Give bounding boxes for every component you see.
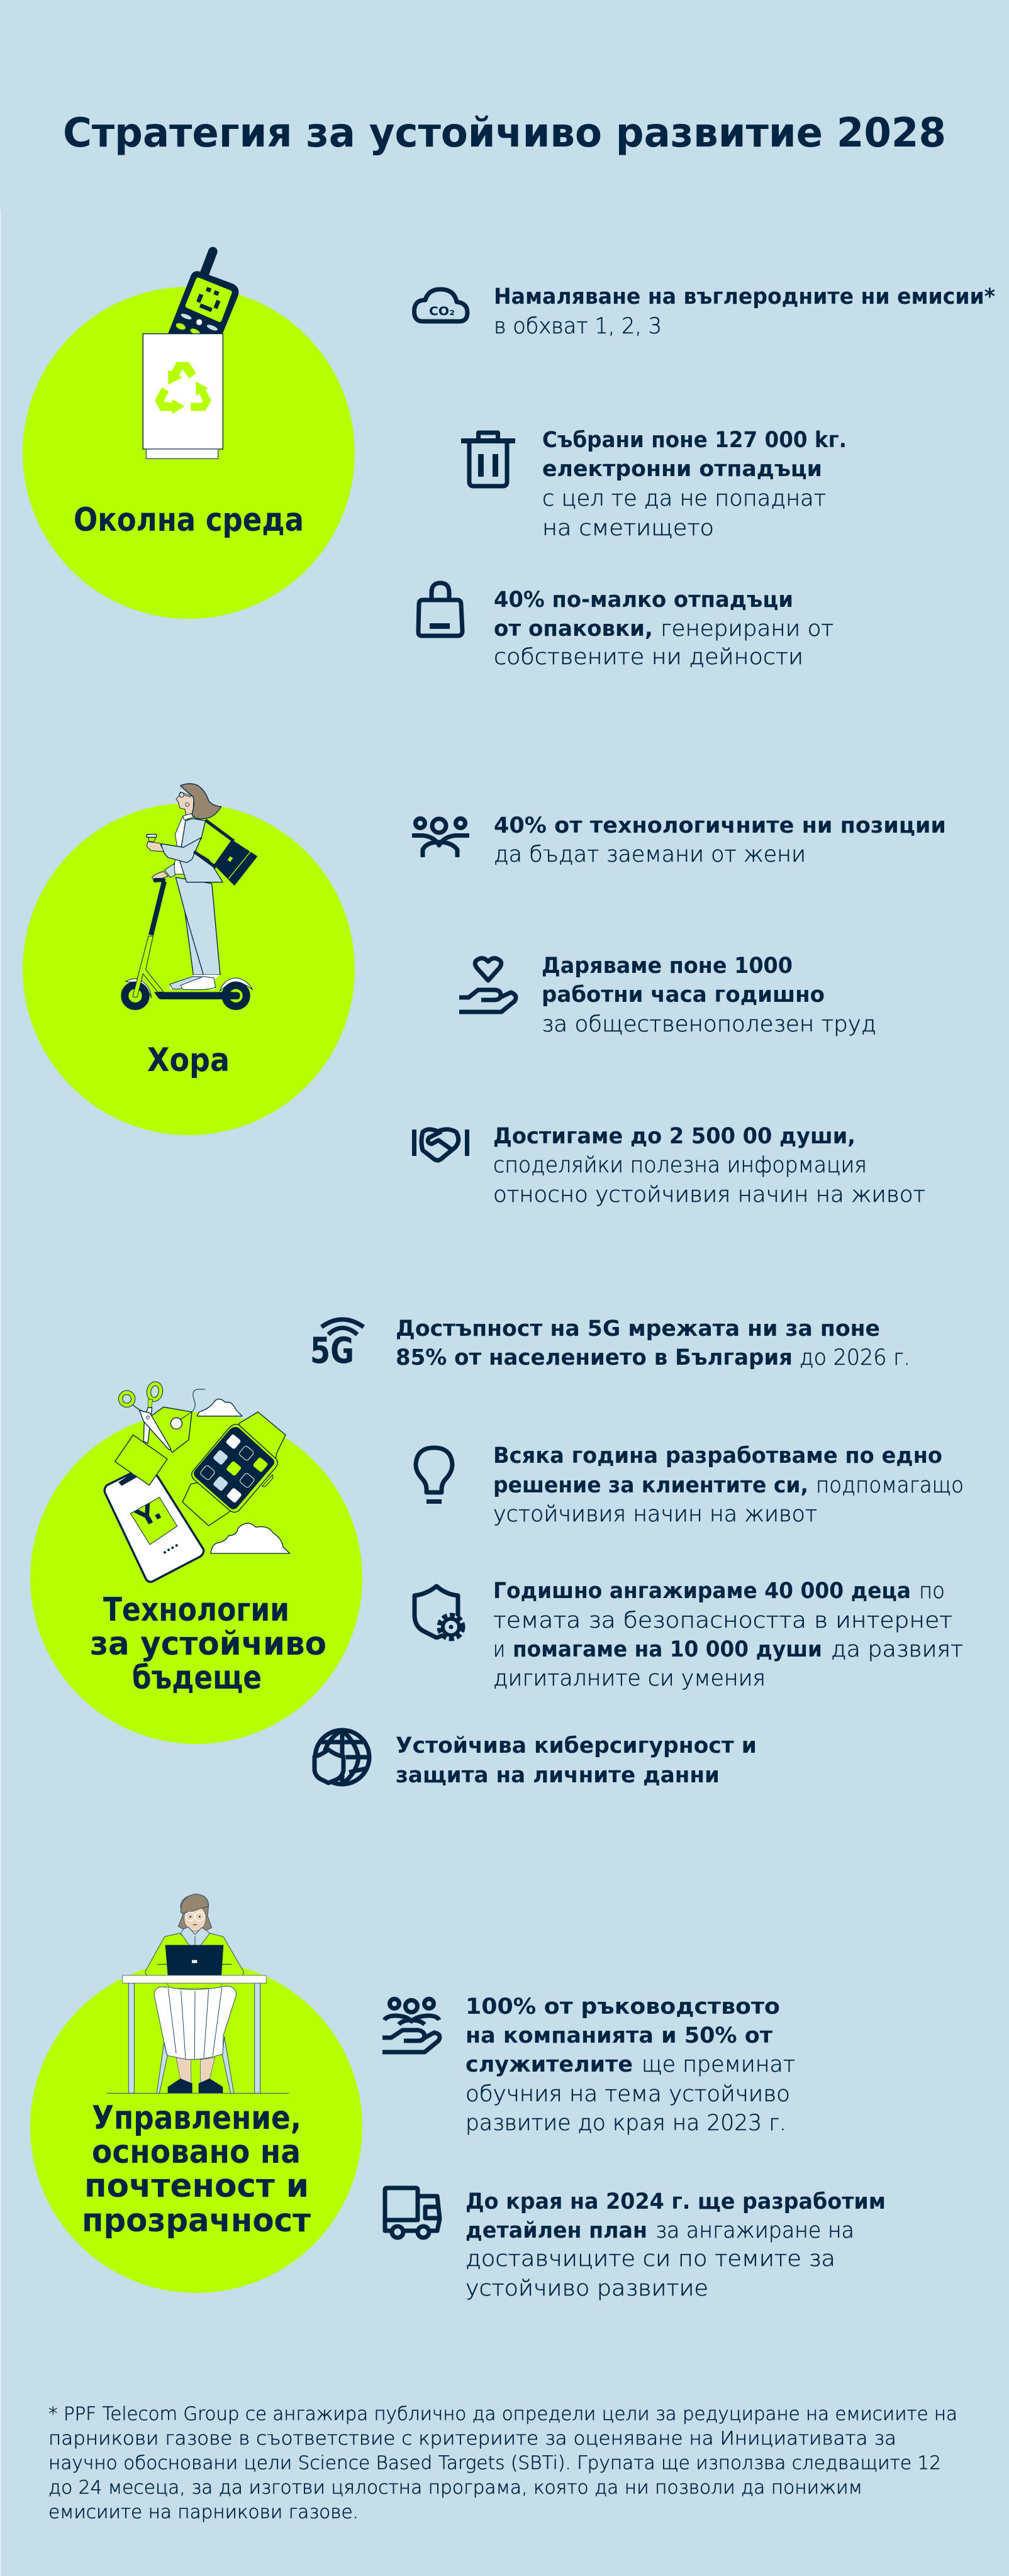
text: supplier plan [465, 2189, 886, 2301]
icon: light bulb [416, 1448, 452, 1504]
heading: technology [90, 1591, 326, 1697]
text: volunteer hours: работни часа годишно [542, 982, 825, 1008]
text: leadership training: обучния на тема устойчиво [465, 2082, 790, 2107]
heading: technology: за устойчиво [90, 1625, 326, 1663]
text: supplier plan: доставчиците си по темите за [465, 2246, 835, 2272]
text: 5G coverage: до 2026 г. [800, 1345, 910, 1370]
text: packaging waste: собствените ни дейности [494, 645, 803, 670]
icon: 5G signal: 5G [310, 1330, 354, 1372]
text: reach: споделяйки полезна информация [493, 1153, 867, 1178]
text: yearly solution: устойчивия начин на живот [493, 1502, 817, 1527]
icon: globe with shield [315, 1730, 369, 1784]
text: cybersecurity [396, 1733, 757, 1788]
text: child online safety [493, 1579, 963, 1691]
text: supplier plan: До края на 2024 г. ще разработим [465, 2189, 886, 2214]
text: yearly solution [493, 1443, 964, 1527]
text: child online safety: да развият [831, 1637, 963, 1662]
text: supplier plan: за ангажиране на [655, 2218, 854, 2243]
text: packaging waste: от опаковки, [494, 616, 653, 641]
text: 5G coverage: 85% от населението в България [396, 1345, 793, 1370]
text: volunteer hours: за общественополезен труд [542, 1012, 876, 1037]
text: child online safety: помагаме на 10 000 души [513, 1637, 822, 1662]
text: child online safety: и [493, 1637, 505, 1662]
text: packaging waste: генерирани от [661, 616, 833, 641]
text: leadership training: служителите [465, 2052, 633, 2077]
icon: trash bin [461, 433, 515, 486]
heading: governance: Управление, [92, 2099, 301, 2137]
text: supplier plan: устойчиво развитие [465, 2276, 708, 2301]
heading: governance: основано на [92, 2133, 301, 2171]
icon: shield with gear [415, 1586, 463, 1639]
text: reach: Достигаме до 2 500 00 души, [493, 1124, 856, 1149]
text: child online safety: Годишно ангажираме 40 000 деца [493, 1579, 911, 1604]
heading: governance [82, 2099, 311, 2240]
illustration: devices, scissors and clouds: Y. [131, 1496, 167, 1533]
text: leadership training: развитие до края на 2023 г. [465, 2111, 786, 2136]
text: leadership training: ще преминат [642, 2052, 795, 2077]
heading: governance: прозрачност [82, 2202, 311, 2240]
text: volunteer hours [542, 953, 876, 1037]
circle: governance [30, 1961, 362, 2293]
panel: governance [30, 1894, 886, 2301]
text: child online safety: темата за безопасността в интернет [493, 1608, 952, 1633]
heading: technology: Технологии [103, 1591, 289, 1629]
text: carbon emissions: Намаляване на въглеродните ни емисии* [494, 284, 995, 309]
icon: delivery truck [385, 2188, 440, 2238]
footnote: до 24 месеца, за да изготви цялостна програма, която да ни позволи да понижим [48, 2477, 862, 2498]
text: leadership training [465, 1994, 795, 2136]
text: child online safety: по [919, 1579, 945, 1604]
heading: governance: почтеност и [84, 2167, 309, 2205]
text: women in tech: да бъдат заемани от жени [494, 842, 806, 867]
heading: technology: бъдеще [132, 1659, 262, 1697]
text: child online safety: дигиталните си умения [493, 1666, 766, 1691]
text: cybersecurity: Устойчива киберсигурност и [396, 1733, 757, 1758]
text: packaging waste: 40% по-малко отпадъци [494, 587, 793, 613]
footnote: * PPF Telecom Group се ангажира публично да определи цели за редуциране на емисиите на [48, 2403, 957, 2424]
text: yearly solution: подпомагащо [816, 1473, 964, 1498]
text: cybersecurity: защита на личните данни [396, 1763, 720, 1788]
text: carbon emissions: в обхват 1, 2, 3 [494, 314, 662, 339]
heading: people: Хора [147, 1041, 230, 1079]
panel: people [23, 784, 946, 1208]
illustration: devices, scissors and clouds [104, 1383, 290, 1582]
illustration: phone in recycling bin [143, 252, 238, 458]
text: volunteer hours: Даряваме поне 1000 [542, 953, 793, 979]
text: leadership training: 100% от ръководството [465, 1994, 780, 2019]
text: e-waste: на сметището [542, 516, 714, 541]
illustration: woman on scooter [125, 784, 257, 1006]
footnote: научно обосновани цели Science Based Targets (SBTi). Групата ще използва следващите 12 [48, 2452, 941, 2473]
text: 5G coverage: Достъпност на 5G мрежата ни за поне [396, 1316, 880, 1341]
circle: environment [23, 287, 355, 619]
text: reach [493, 1124, 925, 1208]
circle: people [23, 803, 355, 1135]
footnote: емисиите на парникови газове. [48, 2501, 359, 2523]
icon: group of people [412, 819, 469, 857]
icon: handshake [412, 1130, 469, 1160]
text: women in tech: 40% от технологичните ни позиции [494, 813, 946, 838]
icon: team on hand [382, 1999, 440, 2052]
icon: CO2 cloud: CO₂ [429, 304, 455, 318]
panel: technology [30, 1316, 964, 1788]
heading: environment: Околна среда [74, 501, 304, 539]
text: carbon emissions [494, 284, 995, 339]
text: packaging waste [494, 587, 833, 670]
text: e-waste: електронни отпадъци [542, 457, 822, 482]
text: women in tech [494, 813, 946, 867]
illustration: woman at desk with laptop [107, 1894, 289, 2093]
icon: heart on hand [459, 958, 516, 1012]
icon: CO2 cloud [414, 289, 467, 321]
text: e-waste: с цел те да не попаднат [542, 486, 826, 511]
text: 5G coverage [396, 1316, 910, 1370]
icon: shopping bag [418, 583, 462, 636]
footnote: парникови газове в съответствие с критериите за оценяване на Инициативата за [48, 2428, 896, 2449]
text: e-waste: Събрани поне 127 000 kг. [542, 428, 847, 453]
title: Стратегия за устойчиво развитие 2028 [63, 110, 946, 157]
text: yearly solution: решение за клиентите си, [493, 1473, 808, 1498]
footnote [48, 2403, 957, 2523]
panel: environment [23, 252, 995, 670]
circle: technology [30, 1412, 362, 1744]
text: e-waste [542, 428, 847, 541]
text: supplier plan: детайлен план [465, 2218, 647, 2243]
text: reach: относно устойчивия начин на живот [493, 1182, 925, 1208]
text: yearly solution: Всяка година разработваме по едно [493, 1443, 942, 1468]
text: leadership training: на компанията и 50% от [465, 2023, 773, 2048]
